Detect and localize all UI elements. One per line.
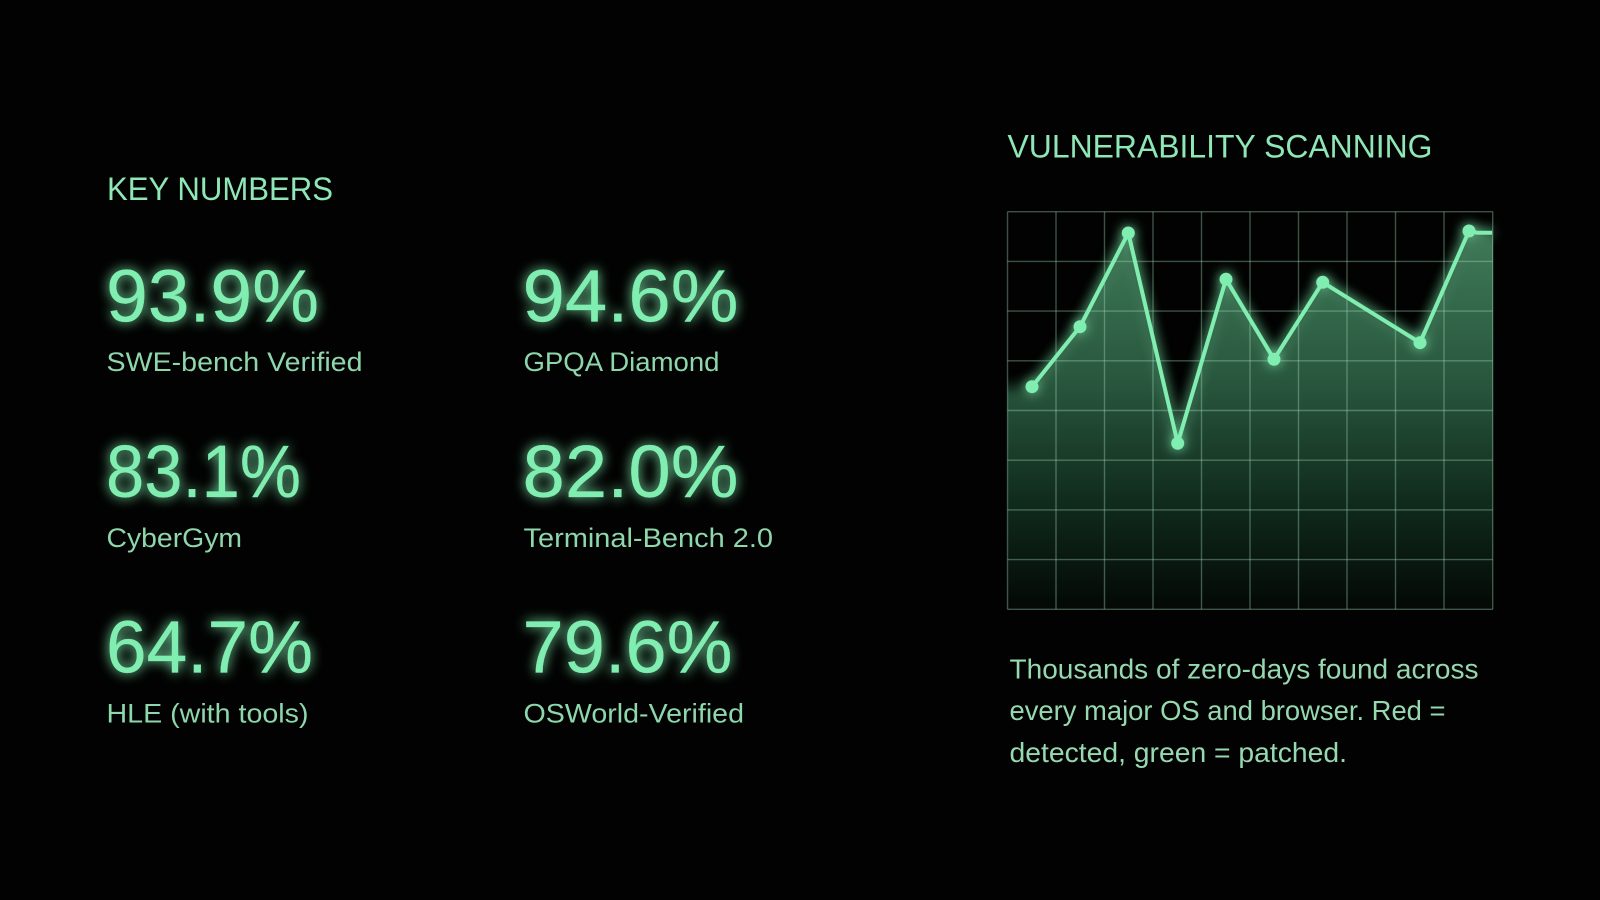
value: 82.0%	[522, 430, 738, 513]
stat: SWE-bench Verified	[106, 254, 362, 377]
value: 79.6%	[522, 606, 732, 688]
label: GPQA Diamond	[524, 347, 720, 377]
line chart	[1006, 211, 1498, 610]
value: 64.7%	[106, 606, 313, 688]
stat: HLE (with tools)	[106, 606, 313, 728]
label: OSWorld-Verified	[524, 698, 744, 728]
label: CyberGym	[106, 523, 242, 553]
description text	[1010, 654, 1478, 768]
stat: GPQA Diamond	[522, 254, 738, 377]
area fill under line	[1008, 223, 1493, 602]
description text: Thousands of zero-days found across	[1010, 654, 1478, 684]
label: SWE-bench Verified	[106, 347, 362, 377]
infographic canvas	[100, 134, 1498, 768]
panel: key numbers	[106, 171, 773, 728]
description text: every major OS and browser. Red =	[1010, 695, 1446, 726]
heading: vulnerability scanning: VULNERABILITY SCANNING	[1008, 128, 1432, 164]
value: 93.9%	[106, 254, 319, 338]
value: 83.1%	[106, 430, 301, 513]
panel: vulnerability scanning	[1006, 134, 1498, 768]
stat: CyberGym	[106, 430, 301, 553]
stat: Terminal-Bench 2.0	[522, 430, 773, 553]
glowing data line with points	[1026, 224, 1492, 450]
label: Terminal-Bench 2.0	[524, 523, 773, 553]
value: 94.6%	[522, 254, 738, 338]
stat: OSWorld-Verified	[522, 606, 744, 728]
heading: key numbers: KEY NUMBERS	[107, 171, 333, 207]
description text: detected, green = patched.	[1010, 737, 1347, 768]
label: HLE (with tools)	[106, 698, 308, 728]
